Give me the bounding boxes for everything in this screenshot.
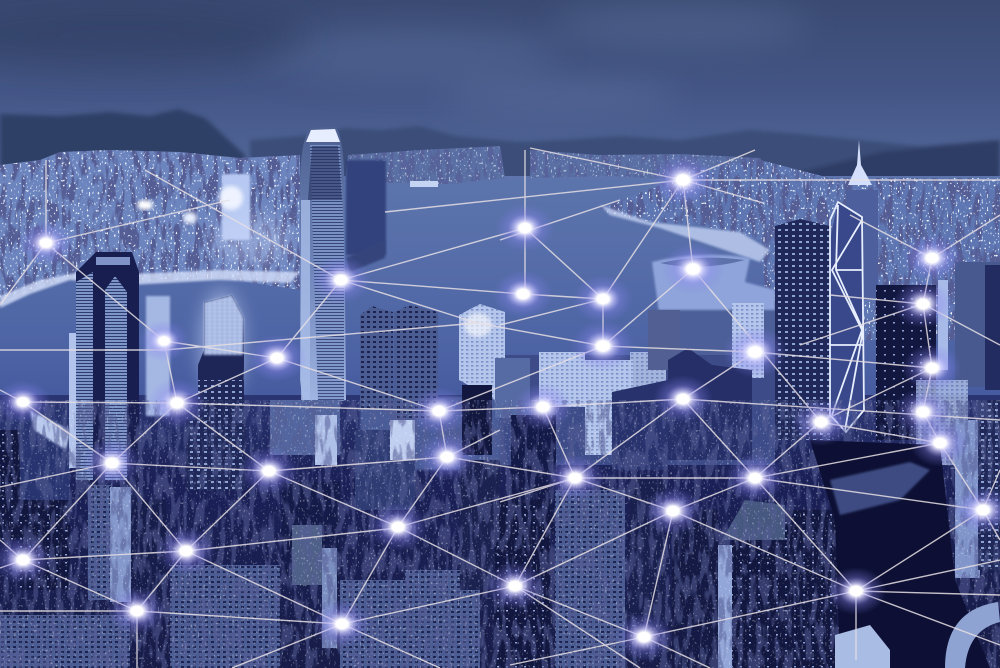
tower: dark grid high-rise bbox=[775, 219, 830, 440]
network nodes bbox=[0, 154, 1000, 661]
tower: lit mid-harbour building bbox=[198, 295, 244, 490]
urban texture over the lower city bbox=[0, 400, 1000, 668]
mountains bbox=[0, 109, 1000, 200]
tower: white office block bbox=[459, 304, 505, 400]
sky bbox=[0, 0, 1000, 190]
tower: left dark skyscraper bbox=[69, 252, 170, 500]
foreground high-rises bbox=[0, 385, 837, 668]
towers: twin residential blocks bbox=[360, 305, 438, 420]
left shore city district bbox=[0, 150, 388, 309]
dark hillside bbox=[810, 440, 1000, 668]
mid-rise district below the water bbox=[0, 310, 1000, 668]
far shore buildings, across the harbour bbox=[346, 146, 762, 187]
right shore city district bbox=[600, 160, 1000, 340]
harbour water bbox=[0, 176, 1000, 456]
towers: right side dark and pale blocks bbox=[876, 262, 1000, 578]
tower: lattice bank tower bbox=[830, 140, 878, 432]
network connection lines bbox=[0, 148, 1000, 668]
towers: central white office cluster bbox=[495, 303, 764, 470]
tower: IFC skyscraper bbox=[300, 126, 346, 410]
